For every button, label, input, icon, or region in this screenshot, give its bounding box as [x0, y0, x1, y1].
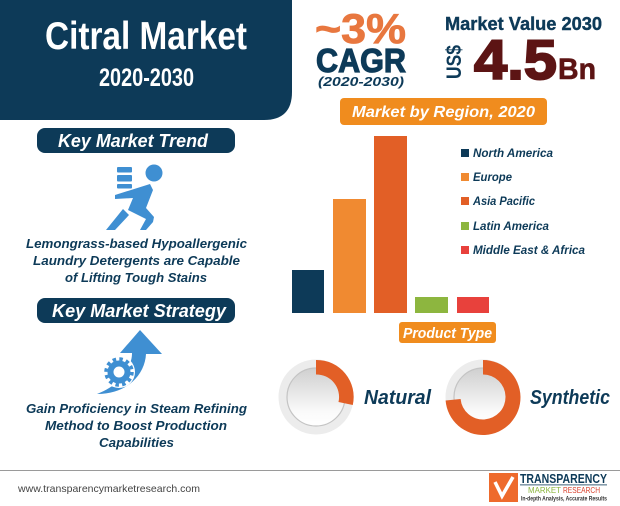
label: synthetic: Synthetic — [530, 387, 610, 409]
CAGR callout: (2020-2030) — [318, 74, 404, 89]
title years: 2020-2030 — [99, 64, 194, 92]
heading: market by region: Market by Region, 2020 — [352, 104, 535, 121]
icon: gear with rising arrow — [97, 330, 162, 394]
legend: Middle East & Africa — [473, 245, 586, 257]
text: trend description: Lemongrass-based Hypoallergenic — [26, 237, 247, 251]
logo: MARKET — [528, 486, 561, 495]
market value callout: Market Value 2030 — [445, 14, 602, 34]
text: trend description: Laundry Detergents are Capable — [33, 254, 240, 268]
text: trend description: of Lifting Tough Stains — [65, 271, 207, 285]
legend: North America — [473, 148, 554, 160]
CAGR callout: ~3% — [315, 5, 406, 52]
legend: Latin America — [473, 221, 550, 233]
website url: www.transparencymarketresearch.com — [17, 483, 200, 495]
legend — [461, 148, 586, 257]
logo: RESEARCH — [563, 486, 600, 495]
CAGR callout: CAGR — [316, 42, 406, 79]
footer rule — [0, 470, 620, 471]
heading: product type: Product Type — [403, 326, 492, 342]
CAGR callout — [315, 5, 406, 89]
heading: market by region — [340, 98, 547, 125]
label: natural: Natural — [364, 387, 431, 409]
text: strategy description — [26, 402, 247, 450]
title panel — [0, 0, 292, 120]
icon: running person carrying stack — [106, 164, 162, 230]
heading: key market trend — [37, 128, 235, 153]
market value callout: 4.5 — [474, 28, 557, 91]
text: strategy description: Capabilities — [99, 436, 174, 450]
market value callout — [443, 14, 602, 91]
title: Citral Market — [45, 15, 247, 58]
bar chart — [292, 136, 489, 313]
text: trend description — [26, 237, 247, 285]
donut: natural — [278, 360, 354, 434]
heading: key market strategy: Key Market Strategy — [52, 300, 228, 321]
heading: key market trend: Key Market Trend — [58, 130, 209, 151]
text: strategy description: Gain Proficiency in Steam Refining — [26, 402, 247, 416]
legend: Europe — [473, 172, 513, 184]
logo — [489, 472, 608, 502]
market value callout: Bn — [558, 53, 596, 86]
market value callout: US$ — [443, 45, 466, 79]
donut: synthetic — [446, 360, 520, 435]
legend: Asia Pacific — [472, 196, 536, 208]
text: strategy description: Method to Boost Production — [45, 419, 227, 433]
